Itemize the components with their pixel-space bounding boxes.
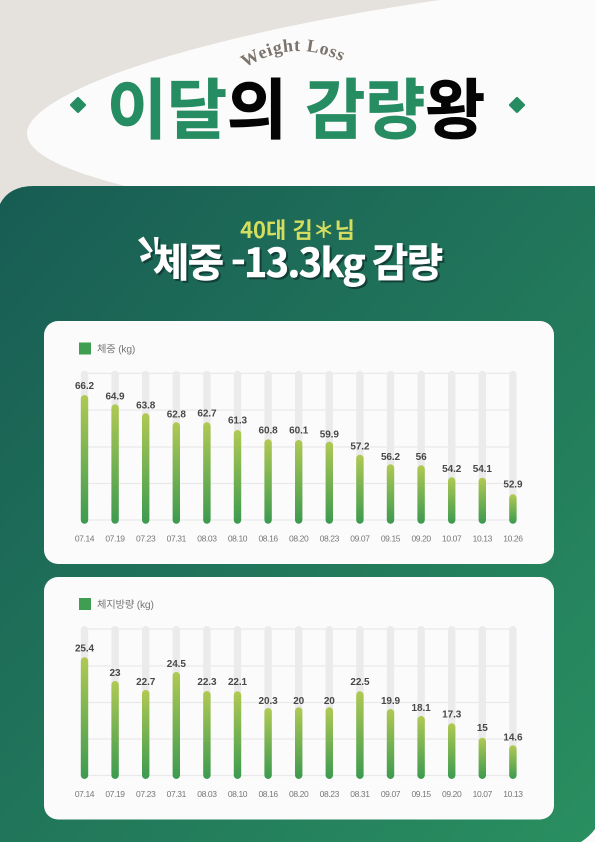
- chart: body fat values: 20: [293, 696, 305, 707]
- legend: body fat: [79, 598, 154, 611]
- chart: weight values: 64.9: [105, 392, 125, 402]
- chart: body fat dates: 08.23: [320, 789, 340, 799]
- chart: weight dates: [75, 534, 523, 544]
- chart: weight dates: 09.07: [350, 534, 370, 544]
- icon: sparkle: [138, 236, 158, 262]
- chart: weight values: [75, 381, 523, 490]
- chart: body fat dates: 10.07: [473, 789, 493, 799]
- chart: body fat dates: 08.20: [289, 789, 309, 799]
- chart: weight values: 62.7: [197, 408, 217, 420]
- chart: body fat dates: 07.19: [105, 789, 125, 799]
- legend: weight: [79, 342, 135, 356]
- chart: body fat values: 20: [324, 696, 335, 707]
- chart: body fat dates: 08.10: [228, 789, 248, 799]
- chart: body fat values: 22.5: [350, 677, 370, 688]
- chart: body fat values: 19.9: [381, 696, 401, 707]
- header: weight loss arc: Weight Loss: [240, 39, 344, 66]
- chart: weight bars: [81, 395, 517, 524]
- chart: body fat dates: 10.13: [503, 789, 523, 799]
- chart: body fat bars: [81, 657, 517, 779]
- panel: weight chart: [44, 321, 554, 564]
- white ellipse backdrop: [27, 0, 595, 187]
- icon: left diamond: [72, 98, 84, 112]
- chart: body fat values: 25.4: [75, 644, 95, 654]
- chart: body fat dates: 09.15: [411, 789, 431, 799]
- chart: body fat dates: 07.23: [136, 789, 156, 799]
- chart: body fat dates: 07.14: [75, 789, 95, 799]
- chart: body fat values: 17.3: [442, 710, 462, 720]
- chart: body fat values: 20.3: [259, 696, 278, 707]
- chart: weight values: 57.2: [350, 442, 370, 452]
- chart: weight dates: 10.13: [473, 534, 493, 544]
- chart: weight dates: 09.20: [411, 534, 431, 544]
- chart: body fat values: 18.1: [412, 703, 431, 714]
- chart: weight values: 60.8: [259, 426, 278, 436]
- headline: 감량: [372, 232, 443, 289]
- chart: weight dates: 10.07: [442, 534, 462, 544]
- chart: weight dates: 08.03: [197, 534, 217, 544]
- chart: body fat dates: 07.31: [167, 789, 187, 799]
- chart: weight dates: 08.16: [258, 534, 278, 544]
- chart: weight values: 54.2: [442, 464, 462, 475]
- headline: 체중: [153, 232, 223, 289]
- chart: body fat values: [75, 644, 523, 744]
- chart: weight values: 56.2: [381, 452, 401, 463]
- chart: body fat values: 22.3: [197, 677, 217, 688]
- chart: weight tracks: [81, 371, 517, 524]
- chart: weight dates: 08.20: [289, 534, 309, 544]
- chart: weight values: 62.8: [167, 410, 186, 420]
- chart: weight values: 60.1: [289, 426, 309, 436]
- panel: body fat chart: [44, 577, 554, 820]
- chart: body fat dates: 09.20: [442, 789, 462, 799]
- icon: right diamond: [510, 98, 524, 112]
- legend: weight: 체중 (kg): [97, 344, 135, 356]
- chart: body fat values: 23: [110, 668, 121, 679]
- chart: weight dates: 09.15: [381, 534, 401, 544]
- headline: -13.3kg: [231, 232, 365, 289]
- chart: weight values: 61.3: [228, 416, 248, 426]
- green panel: [0, 186, 595, 842]
- subtitle: 40대 김＊님: [240, 213, 355, 245]
- legend: body fat: 체지방량 (kg): [97, 599, 154, 611]
- chart: body fat dates: 08.03: [197, 789, 217, 799]
- title: 이달의 감량왕: [107, 57, 485, 152]
- chart: body fat values: 14.6: [503, 732, 523, 744]
- chart: weight dates: 07.31: [167, 534, 187, 544]
- chart: weight values: 59.9: [320, 430, 339, 440]
- chart: weight values: 54.1: [473, 464, 492, 475]
- chart: weight dates: 07.23: [136, 534, 156, 544]
- chart: body fat dates: 08.16: [258, 789, 278, 799]
- chart: body fat values: 22.1: [228, 677, 248, 688]
- chart: body fat values: 15: [477, 723, 488, 734]
- chart: body fat dates: 09.07: [381, 789, 401, 799]
- chart: body fat values: 24.5: [167, 659, 186, 670]
- chart: body fat dates: [75, 789, 523, 799]
- chart: body fat dates: 08.31: [350, 789, 370, 799]
- chart: weight values: 66.2: [75, 381, 95, 392]
- chart: weight dates: 10.26: [503, 534, 523, 544]
- chart: weight dates: 07.14: [75, 534, 95, 544]
- chart: weight dates: 08.10: [228, 534, 248, 544]
- chart: body fat tracks: [81, 626, 517, 779]
- chart: weight dates: 08.23: [320, 534, 340, 544]
- header: weight loss arc: [240, 39, 344, 66]
- chart: weight values: 63.8: [136, 400, 156, 412]
- chart: weight values: 56: [416, 452, 427, 463]
- chart: weight values: 52.9: [503, 480, 523, 490]
- chart: weight dates: 07.19: [105, 534, 125, 544]
- chart: body fat values: 22.7: [136, 677, 156, 688]
